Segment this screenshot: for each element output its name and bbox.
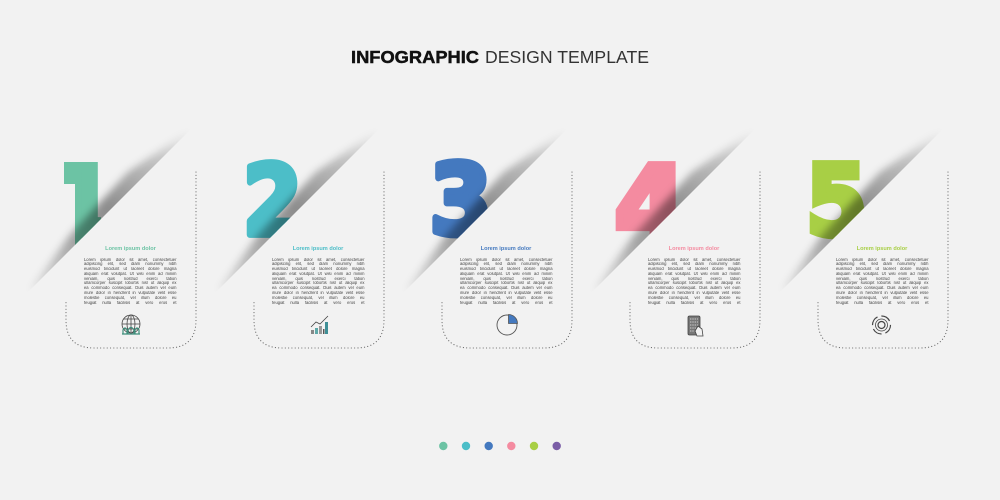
dotted outline [66,172,196,348]
icon: pie chart [497,314,518,335]
body text [648,258,741,308]
number 2: 2 [243,144,302,258]
title: DESIGN TEMPLATE [485,47,649,67]
heading: Lorem ipsum dolor [669,246,720,252]
panel: step 4 [594,130,760,348]
pagination dots [439,442,561,450]
title [351,47,649,67]
number 5: 5 [806,144,867,258]
fold shadow [786,138,934,286]
number 3: 3 [430,144,492,257]
number 4: 4 [615,144,688,266]
heading: Lorem ipsum dolor [857,246,908,252]
body text [460,258,553,308]
fold shadow [222,138,370,286]
heading: Lorem ipsum dolor [481,246,532,252]
fold shadow [598,138,746,286]
fold shadow [34,138,182,286]
panel: step 5 [782,130,948,348]
icon: hand holding phone [688,316,703,336]
icon: globe with people [122,315,140,334]
icon: growth chart [311,316,328,334]
panel: step 3 [406,130,572,348]
heading: Lorem ipsum dolor [293,246,344,252]
heading: Lorem ipsum dolor [105,246,157,252]
fold shadow [410,138,558,286]
dotted outline [254,172,384,348]
icon: circular gear cycle [872,316,890,334]
panel: step 1 [30,130,196,348]
body text [836,258,929,308]
dotted outline [818,172,948,348]
title: INFOGRAPHIC [351,47,479,67]
body text [272,258,365,308]
panel: step 2 [218,130,384,348]
dotted outline [630,172,760,348]
body text [84,258,177,308]
number 1: 1 [50,142,113,263]
dotted outline [442,172,572,348]
